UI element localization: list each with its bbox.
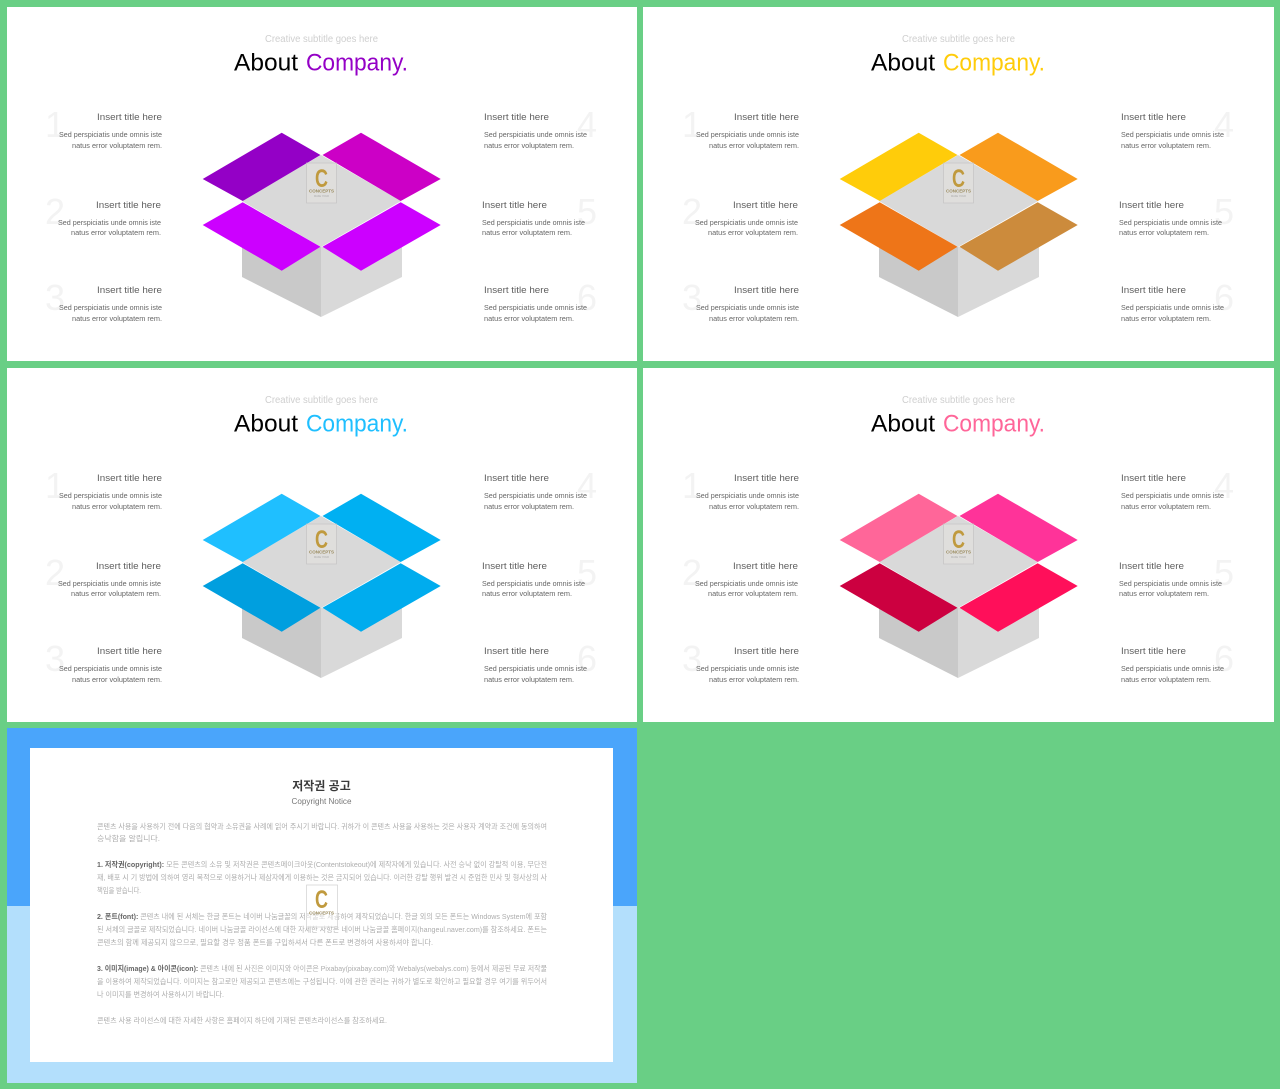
open box illustration (840, 494, 1078, 678)
item 3: Insert title here (97, 646, 162, 657)
item 2: natus error voluptatem rem. (708, 589, 798, 598)
item 2: Insert title here (96, 200, 161, 211)
title: Company. (306, 50, 408, 76)
watermark logo (306, 163, 336, 203)
subtitle: Creative subtitle goes here (265, 395, 378, 406)
item 1 (45, 104, 162, 150)
section 1 copyright: 1. 저작권(copyright): 모든 콘텐츠의 소유 및 저작권은 콘텐츠메이크아웃(Contentstokeout)에 제작자에게 있습니다. 사전 승낙 없이 강탈적 이용, 무단전 (97, 859, 547, 869)
item 4: Insert title here (484, 112, 549, 123)
title: About (871, 410, 935, 438)
item 4: Insert title here (1121, 112, 1186, 123)
item 4: natus error voluptatem rem. (1121, 502, 1211, 511)
item 3: Insert title here (734, 285, 799, 296)
watermark logo: C (315, 526, 328, 554)
watermark logo (306, 885, 338, 927)
item 2 (45, 191, 161, 237)
item 2: Sed perspiciatis unde omnis iste (695, 218, 798, 227)
item 2 (682, 191, 798, 237)
item 1: 1 (682, 104, 702, 145)
item 6: Insert title here (484, 646, 549, 657)
watermark logo: MAKE YOUR (951, 195, 966, 198)
item 1: natus error voluptatem rem. (72, 502, 162, 511)
item 6: natus error voluptatem rem. (484, 675, 574, 684)
item 4 (1121, 104, 1234, 150)
watermark logo: CONCEPTS (946, 550, 971, 554)
item 1 (45, 465, 162, 511)
intro paragraph: 콘텐츠 사용을 사용하기 전에 다음의 협약과 소유권을 사례에 읽어 주시기 바랍니다. 귀하가 이 콘텐츠 사용을 사용하는 것은 사용자 계약과 조건에 동의하여 (97, 821, 547, 831)
intro paragraph: 승낙함을 알립니다. (97, 833, 160, 843)
watermark logo: MAKE YOUR (314, 556, 329, 559)
subtitle: Creative subtitle goes here (265, 34, 378, 45)
item 2: Sed perspiciatis unde omnis iste (695, 579, 798, 588)
item 3: natus error voluptatem rem. (709, 675, 799, 684)
watermark logo: CONCEPTS (946, 188, 971, 194)
item 6: Sed perspiciatis unde omnis iste (1121, 664, 1224, 673)
copyright heading: 저작권 공고 (292, 778, 351, 793)
item 1: Sed perspiciatis unde omnis iste (696, 130, 799, 139)
item 3: Sed perspiciatis unde omnis iste (59, 303, 162, 312)
panel: purple slide (7, 7, 637, 361)
item 1: Sed perspiciatis unde omnis iste (59, 130, 162, 139)
item 4 (484, 465, 597, 511)
item 2: natus error voluptatem rem. (71, 228, 161, 237)
item 3: Sed perspiciatis unde omnis iste (59, 664, 162, 673)
panel: pink slide (643, 368, 1274, 722)
item 4: Insert title here (1121, 473, 1186, 484)
item 5: natus error voluptatem rem. (482, 228, 572, 237)
item 3: Insert title here (734, 646, 799, 657)
item 4: 4 (577, 104, 597, 145)
item 6: natus error voluptatem rem. (1121, 675, 1211, 684)
item 3 (682, 277, 799, 323)
watermark logo (944, 524, 974, 564)
section 2 font: 2. 폰트(font): 콘텐츠 내에 된 서체는 한글 폰트는 네이버 나눔글꼴의 저작물로 제공하여 제작되었습니다. 한글 외의 모든 폰트는 Windows System에 포함 (97, 911, 547, 921)
item 6: natus error voluptatem rem. (484, 314, 574, 323)
title: Company. (943, 50, 1045, 76)
watermark logo: C (952, 526, 965, 554)
panel: blue slide (7, 368, 637, 722)
item 3: 3 (45, 638, 65, 679)
item 4: Insert title here (484, 473, 549, 484)
item 6: 6 (1214, 638, 1234, 679)
title: Company. (306, 410, 408, 438)
item 2: Insert title here (96, 561, 161, 572)
watermark logo (306, 524, 336, 564)
title (871, 410, 1045, 438)
item 2 (45, 552, 161, 598)
item 2: Insert title here (733, 200, 798, 211)
item 5: natus error voluptatem rem. (1119, 228, 1209, 237)
item 4: Sed perspiciatis unde omnis iste (1121, 130, 1224, 139)
item 5: 5 (577, 191, 597, 232)
panel: copyright notice (7, 728, 637, 1083)
item 6 (1121, 277, 1234, 323)
closing line: 콘텐츠 사용 라이선스에 대한 자세한 사항은 홈페이지 하단에 기재된 콘텐츠라이선스를 참조하세요. (97, 1015, 387, 1025)
item 1: Insert title here (97, 112, 162, 123)
item 6: Sed perspiciatis unde omnis iste (1121, 303, 1224, 312)
item 3: 3 (45, 277, 65, 318)
section 3 image and icon (97, 963, 547, 999)
item 6: Insert title here (484, 285, 549, 296)
item 6: Sed perspiciatis unde omnis iste (484, 664, 587, 673)
subtitle: Creative subtitle goes here (902, 395, 1015, 406)
item 1: 1 (682, 465, 702, 506)
item 2: 2 (45, 191, 65, 232)
item 3: Sed perspiciatis unde omnis iste (696, 664, 799, 673)
item 3 (45, 638, 162, 684)
item 3: 3 (682, 277, 702, 318)
item 5 (482, 191, 597, 237)
section 1 copyright (97, 859, 547, 895)
open box illustration (840, 133, 1078, 317)
item 5: 5 (577, 552, 597, 593)
item 6: 6 (577, 277, 597, 318)
item 6: Insert title here (1121, 285, 1186, 296)
item 5: Insert title here (482, 561, 547, 572)
item 1: natus error voluptatem rem. (709, 141, 799, 150)
item 6 (484, 277, 597, 323)
item 3: natus error voluptatem rem. (709, 314, 799, 323)
item 6: Insert title here (1121, 646, 1186, 657)
item 6: 6 (577, 638, 597, 679)
item 1: 1 (45, 104, 65, 145)
item 5: Insert title here (1119, 561, 1184, 572)
open box illustration (203, 494, 441, 678)
item 4: Sed perspiciatis unde omnis iste (1121, 491, 1224, 500)
item 3: Insert title here (97, 285, 162, 296)
item 4: natus error voluptatem rem. (484, 141, 574, 150)
item 3: natus error voluptatem rem. (72, 675, 162, 684)
watermark logo: C (315, 165, 328, 193)
item 3: natus error voluptatem rem. (72, 314, 162, 323)
item 6 (1121, 638, 1234, 684)
watermark logo: CONCEPTS (309, 550, 334, 554)
item 4: Sed perspiciatis unde omnis iste (484, 130, 587, 139)
item 5: Sed perspiciatis unde omnis iste (1119, 218, 1222, 227)
item 5 (1119, 552, 1234, 598)
intro paragraph (97, 821, 547, 843)
watermark logo (944, 163, 974, 203)
item 6: Sed perspiciatis unde omnis iste (484, 303, 587, 312)
item 4 (1121, 465, 1234, 511)
item 3: Sed perspiciatis unde omnis iste (696, 303, 799, 312)
item 4: natus error voluptatem rem. (484, 502, 574, 511)
item 6: natus error voluptatem rem. (1121, 314, 1211, 323)
watermark logo: MAKE YOUR (951, 556, 966, 559)
item 2: 2 (45, 552, 65, 593)
item 1: natus error voluptatem rem. (72, 141, 162, 150)
subtitle: Creative subtitle goes here (902, 34, 1015, 45)
item 5: 5 (1214, 552, 1234, 593)
item 2: Sed perspiciatis unde omnis iste (58, 218, 161, 227)
item 3 (682, 638, 799, 684)
item 6 (484, 638, 597, 684)
open box illustration (203, 133, 441, 317)
item 5: Insert title here (482, 200, 547, 211)
watermark logo: CONCEPTS (309, 910, 334, 916)
item 2: 2 (682, 552, 702, 593)
section 3 image and icon: 나 이미지를 변경하여 사용하시기 바랍니다. (97, 989, 224, 999)
watermark logo: C (315, 886, 328, 914)
item 1: Sed perspiciatis unde omnis iste (59, 491, 162, 500)
title: About (234, 50, 298, 76)
title: About (234, 410, 298, 438)
item 5: Sed perspiciatis unde omnis iste (482, 218, 585, 227)
section 3 image and icon: 을 이용하여 제작되었습니다. 이미지는 참고로만 제공되고 콘텐츠에는 구성됩니다. 이에 관한 권리는 귀하가 별도로 확인하고 필요할 경우 여기를 위두어서 (97, 976, 547, 986)
title: About (871, 50, 935, 76)
title (871, 50, 1045, 76)
item 5: natus error voluptatem rem. (1119, 589, 1209, 598)
item 1: natus error voluptatem rem. (709, 502, 799, 511)
item 5: Sed perspiciatis unde omnis iste (1119, 579, 1222, 588)
item 4: natus error voluptatem rem. (1121, 141, 1211, 150)
item 1: 1 (45, 465, 65, 506)
item 4: 4 (1214, 104, 1234, 145)
item 5: natus error voluptatem rem. (482, 589, 572, 598)
item 4 (484, 104, 597, 150)
copyright subheading: Copyright Notice (292, 796, 352, 806)
item 3: 3 (682, 638, 702, 679)
title (234, 410, 408, 438)
item 5 (1119, 191, 1234, 237)
item 5: 5 (1214, 191, 1234, 232)
title (234, 50, 408, 76)
item 2: natus error voluptatem rem. (71, 589, 161, 598)
item 1: Sed perspiciatis unde omnis iste (696, 491, 799, 500)
item 2: 2 (682, 191, 702, 232)
section 2 font (97, 911, 547, 947)
item 5: Insert title here (1119, 200, 1184, 211)
item 2: natus error voluptatem rem. (708, 228, 798, 237)
item 2: Insert title here (733, 561, 798, 572)
title: Company. (943, 410, 1045, 438)
item 1 (682, 104, 799, 150)
item 5: Sed perspiciatis unde omnis iste (482, 579, 585, 588)
section 2 font: 콘텐츠의 함께 제공되지 않으므로, 필요할 경우 정품 폰트를 구입하셔서 다른 폰트로 변경하여 사용하셔야 합니다. (97, 937, 433, 947)
watermark logo: CONCEPTS (309, 188, 334, 194)
section 2 font: 된 서체의 글꼴로 제작되었습니다. 네이버 나눔글꼴 라이선스에 대한 자세한 사항은 네이버 나눔글꼴 홈페이지(hangeul.naver.com)를 참조하세요. 폰트는 (97, 924, 547, 934)
item 6: 6 (1214, 277, 1234, 318)
section 1 copyright: 책임을 받습니다. (97, 885, 141, 895)
item 3 (45, 277, 162, 323)
item 4: 4 (1214, 465, 1234, 506)
item 4: 4 (577, 465, 597, 506)
section 1 copyright: 재, 배포 시 기 방법에 의하여 영리 목적으로 이용하거나 제삼자에게 이용하는 것은 금지되어 있습니다. 이러한 강탈 행위 발견 시 준엄한 민사 및 형사상의 사 (97, 872, 547, 882)
item 2: Sed perspiciatis unde omnis iste (58, 579, 161, 588)
panel: yellow slide (643, 7, 1274, 361)
item 1: Insert title here (734, 112, 799, 123)
section 3 image and icon: 3. 이미지(image) & 아이콘(icon): 콘텐츠 내에 된 사진은 이미지와 아이콘은 Pixabay(pixabay.com)와 Webalys(webalys.com) 등에서 제공된 무료 저작물 (97, 963, 547, 973)
item 2 (682, 552, 798, 598)
item 1: Insert title here (734, 473, 799, 484)
item 5 (482, 552, 597, 598)
watermark logo: C (952, 165, 965, 193)
item 1 (682, 465, 799, 511)
item 4: Sed perspiciatis unde omnis iste (484, 491, 587, 500)
watermark logo: MAKE YOUR (314, 195, 329, 198)
item 1: Insert title here (97, 473, 162, 484)
